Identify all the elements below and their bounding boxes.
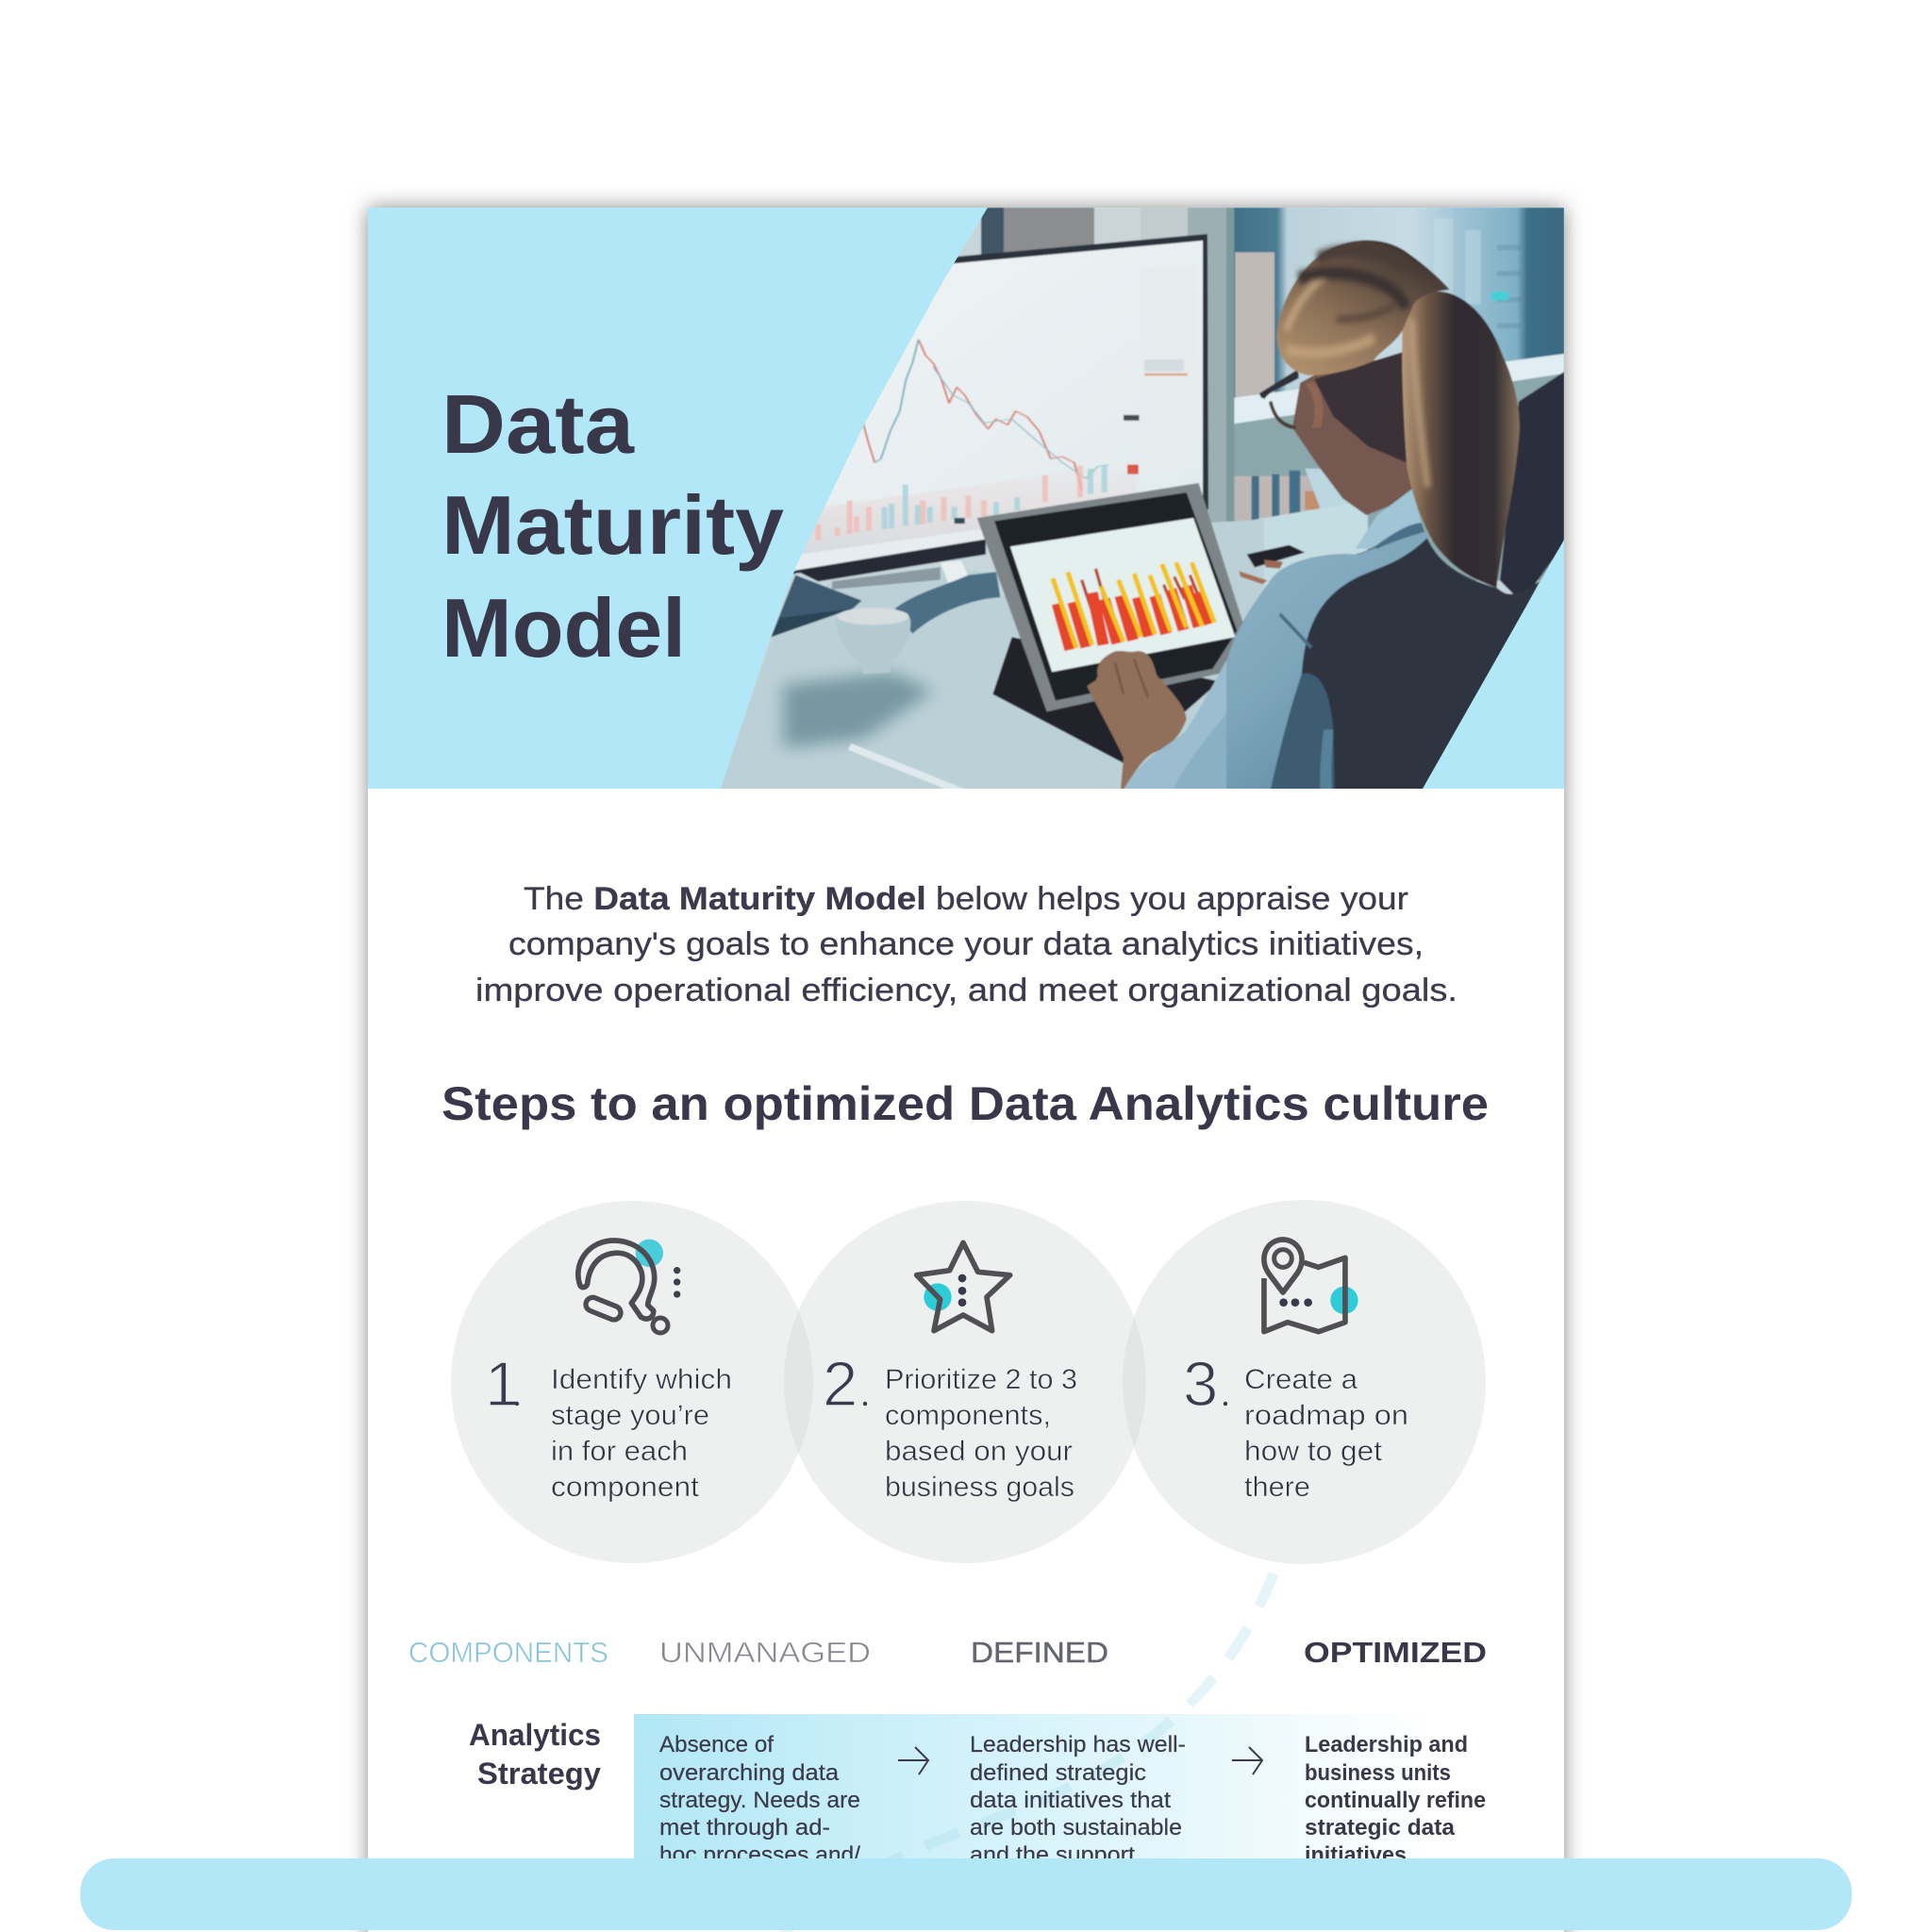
arrow: defined to optimized bbox=[1232, 1747, 1262, 1774]
intro paragraph: The Data Maturity Model below helps you appraise your bbox=[524, 881, 1408, 917]
cell: unmanaged: hoc processes and/ bbox=[659, 1842, 860, 1868]
cell: unmanaged: overarching data bbox=[659, 1760, 840, 1786]
step 2 text: based on your bbox=[885, 1436, 1073, 1467]
row label: Analytics bbox=[469, 1718, 601, 1752]
row label: Strategy bbox=[477, 1757, 601, 1790]
monitor histogram bbox=[801, 462, 1136, 555]
table cells bbox=[659, 1732, 1486, 1868]
dashed curve path bbox=[783, 1574, 1274, 1932]
step 3 text: there bbox=[1244, 1472, 1310, 1503]
table column headers: UNMANAGED bbox=[659, 1636, 871, 1669]
tablet bar chart bbox=[1053, 562, 1214, 650]
step 2 text: business goals bbox=[885, 1472, 1074, 1503]
step numbers: 2 bbox=[823, 1349, 858, 1420]
cell: defined: defined strategic bbox=[970, 1760, 1146, 1786]
tablet bbox=[977, 483, 1244, 711]
intro paragraph: improve operational efficiency, and meet organizational goals. bbox=[475, 973, 1457, 1008]
step 2 text: components, bbox=[885, 1400, 1051, 1431]
section heading: Steps to an optimized Data Analytics culture bbox=[441, 1077, 1489, 1130]
desk scene bbox=[717, 462, 1264, 794]
step 3 text: roadmap on bbox=[1244, 1400, 1408, 1431]
step 3 text: Create a bbox=[1244, 1364, 1357, 1395]
cell: unmanaged: met through ad- bbox=[659, 1815, 830, 1840]
title bbox=[441, 377, 784, 675]
cell: optimized: continually refine bbox=[1305, 1788, 1486, 1813]
step 2 text bbox=[885, 1364, 1077, 1503]
step 3 text: how to get bbox=[1244, 1436, 1383, 1467]
icon: headset bbox=[578, 1240, 680, 1333]
hand on tablet bbox=[1087, 651, 1187, 794]
icon: map with location pin bbox=[1264, 1240, 1358, 1332]
intro paragraph: company's goals to enhance your data analytics initiatives, bbox=[508, 926, 1424, 962]
document page with drop shadow bbox=[368, 208, 1564, 1932]
window behind monitor bbox=[981, 208, 1004, 264]
arrow: unmanaged to defined bbox=[898, 1747, 928, 1774]
woman from behind bbox=[1226, 241, 1564, 804]
hero banner bbox=[368, 208, 1566, 804]
cell: optimized: business units bbox=[1305, 1760, 1451, 1786]
row label bbox=[469, 1718, 601, 1790]
window and city, right part bbox=[1226, 208, 1564, 585]
step 1 text: stage you’re bbox=[551, 1400, 709, 1431]
cell: defined bbox=[970, 1732, 1186, 1868]
table column headers bbox=[408, 1636, 1487, 1669]
step numbers bbox=[485, 1349, 1227, 1420]
title: Data bbox=[441, 377, 635, 471]
monitor side panel bbox=[1123, 359, 1189, 475]
sleeve left part bbox=[1124, 660, 1226, 789]
icon: star bbox=[917, 1242, 1010, 1331]
hero photo: woman analysing charts on tablet and monitor bbox=[717, 208, 1566, 804]
cell: unmanaged: Absence of bbox=[659, 1732, 774, 1757]
cell: defined: and the support bbox=[970, 1842, 1135, 1868]
title: Maturity bbox=[441, 478, 784, 572]
cell: defined: data initiatives that bbox=[970, 1788, 1171, 1813]
table column headers: DEFINED bbox=[971, 1636, 1108, 1669]
step 1 text: component bbox=[551, 1472, 700, 1503]
hair top bbox=[1276, 241, 1450, 375]
bottom rounded bar bbox=[80, 1858, 1852, 1930]
cell: defined: are both sustainable bbox=[970, 1815, 1182, 1840]
monitor bbox=[792, 233, 1209, 575]
step 3 text bbox=[1244, 1364, 1408, 1503]
title: Model bbox=[441, 581, 686, 675]
cell: optimized: strategic data bbox=[1305, 1815, 1456, 1840]
table column headers: OPTIMIZED bbox=[1304, 1636, 1487, 1669]
cell: optimized bbox=[1305, 1732, 1486, 1868]
table column headers: COMPONENTS bbox=[408, 1636, 608, 1669]
step numbers: 3 bbox=[1183, 1349, 1218, 1420]
step 1 text: in for each bbox=[551, 1436, 688, 1467]
cell: unmanaged: strategy. Needs are bbox=[659, 1788, 860, 1813]
steps: three overlapping circles bbox=[451, 1200, 1486, 1564]
cell: defined: Leadership has well- bbox=[970, 1732, 1186, 1757]
step 1 text bbox=[551, 1364, 732, 1503]
monitor line chart bbox=[863, 340, 1109, 491]
cell: optimized: Leadership and bbox=[1305, 1732, 1468, 1757]
cell: unmanaged bbox=[659, 1732, 860, 1868]
shirt bbox=[1226, 529, 1541, 804]
cell: optimized: initiatives bbox=[1305, 1842, 1407, 1868]
analytics strategy row panel bbox=[634, 1714, 1564, 1858]
step 2 text: Prioritize 2 to 3 bbox=[885, 1364, 1077, 1395]
step 1 text: Identify which bbox=[551, 1364, 732, 1395]
ponytail bbox=[1402, 291, 1520, 588]
intro paragraph bbox=[475, 881, 1457, 1008]
step numbers: 1 bbox=[485, 1349, 520, 1420]
